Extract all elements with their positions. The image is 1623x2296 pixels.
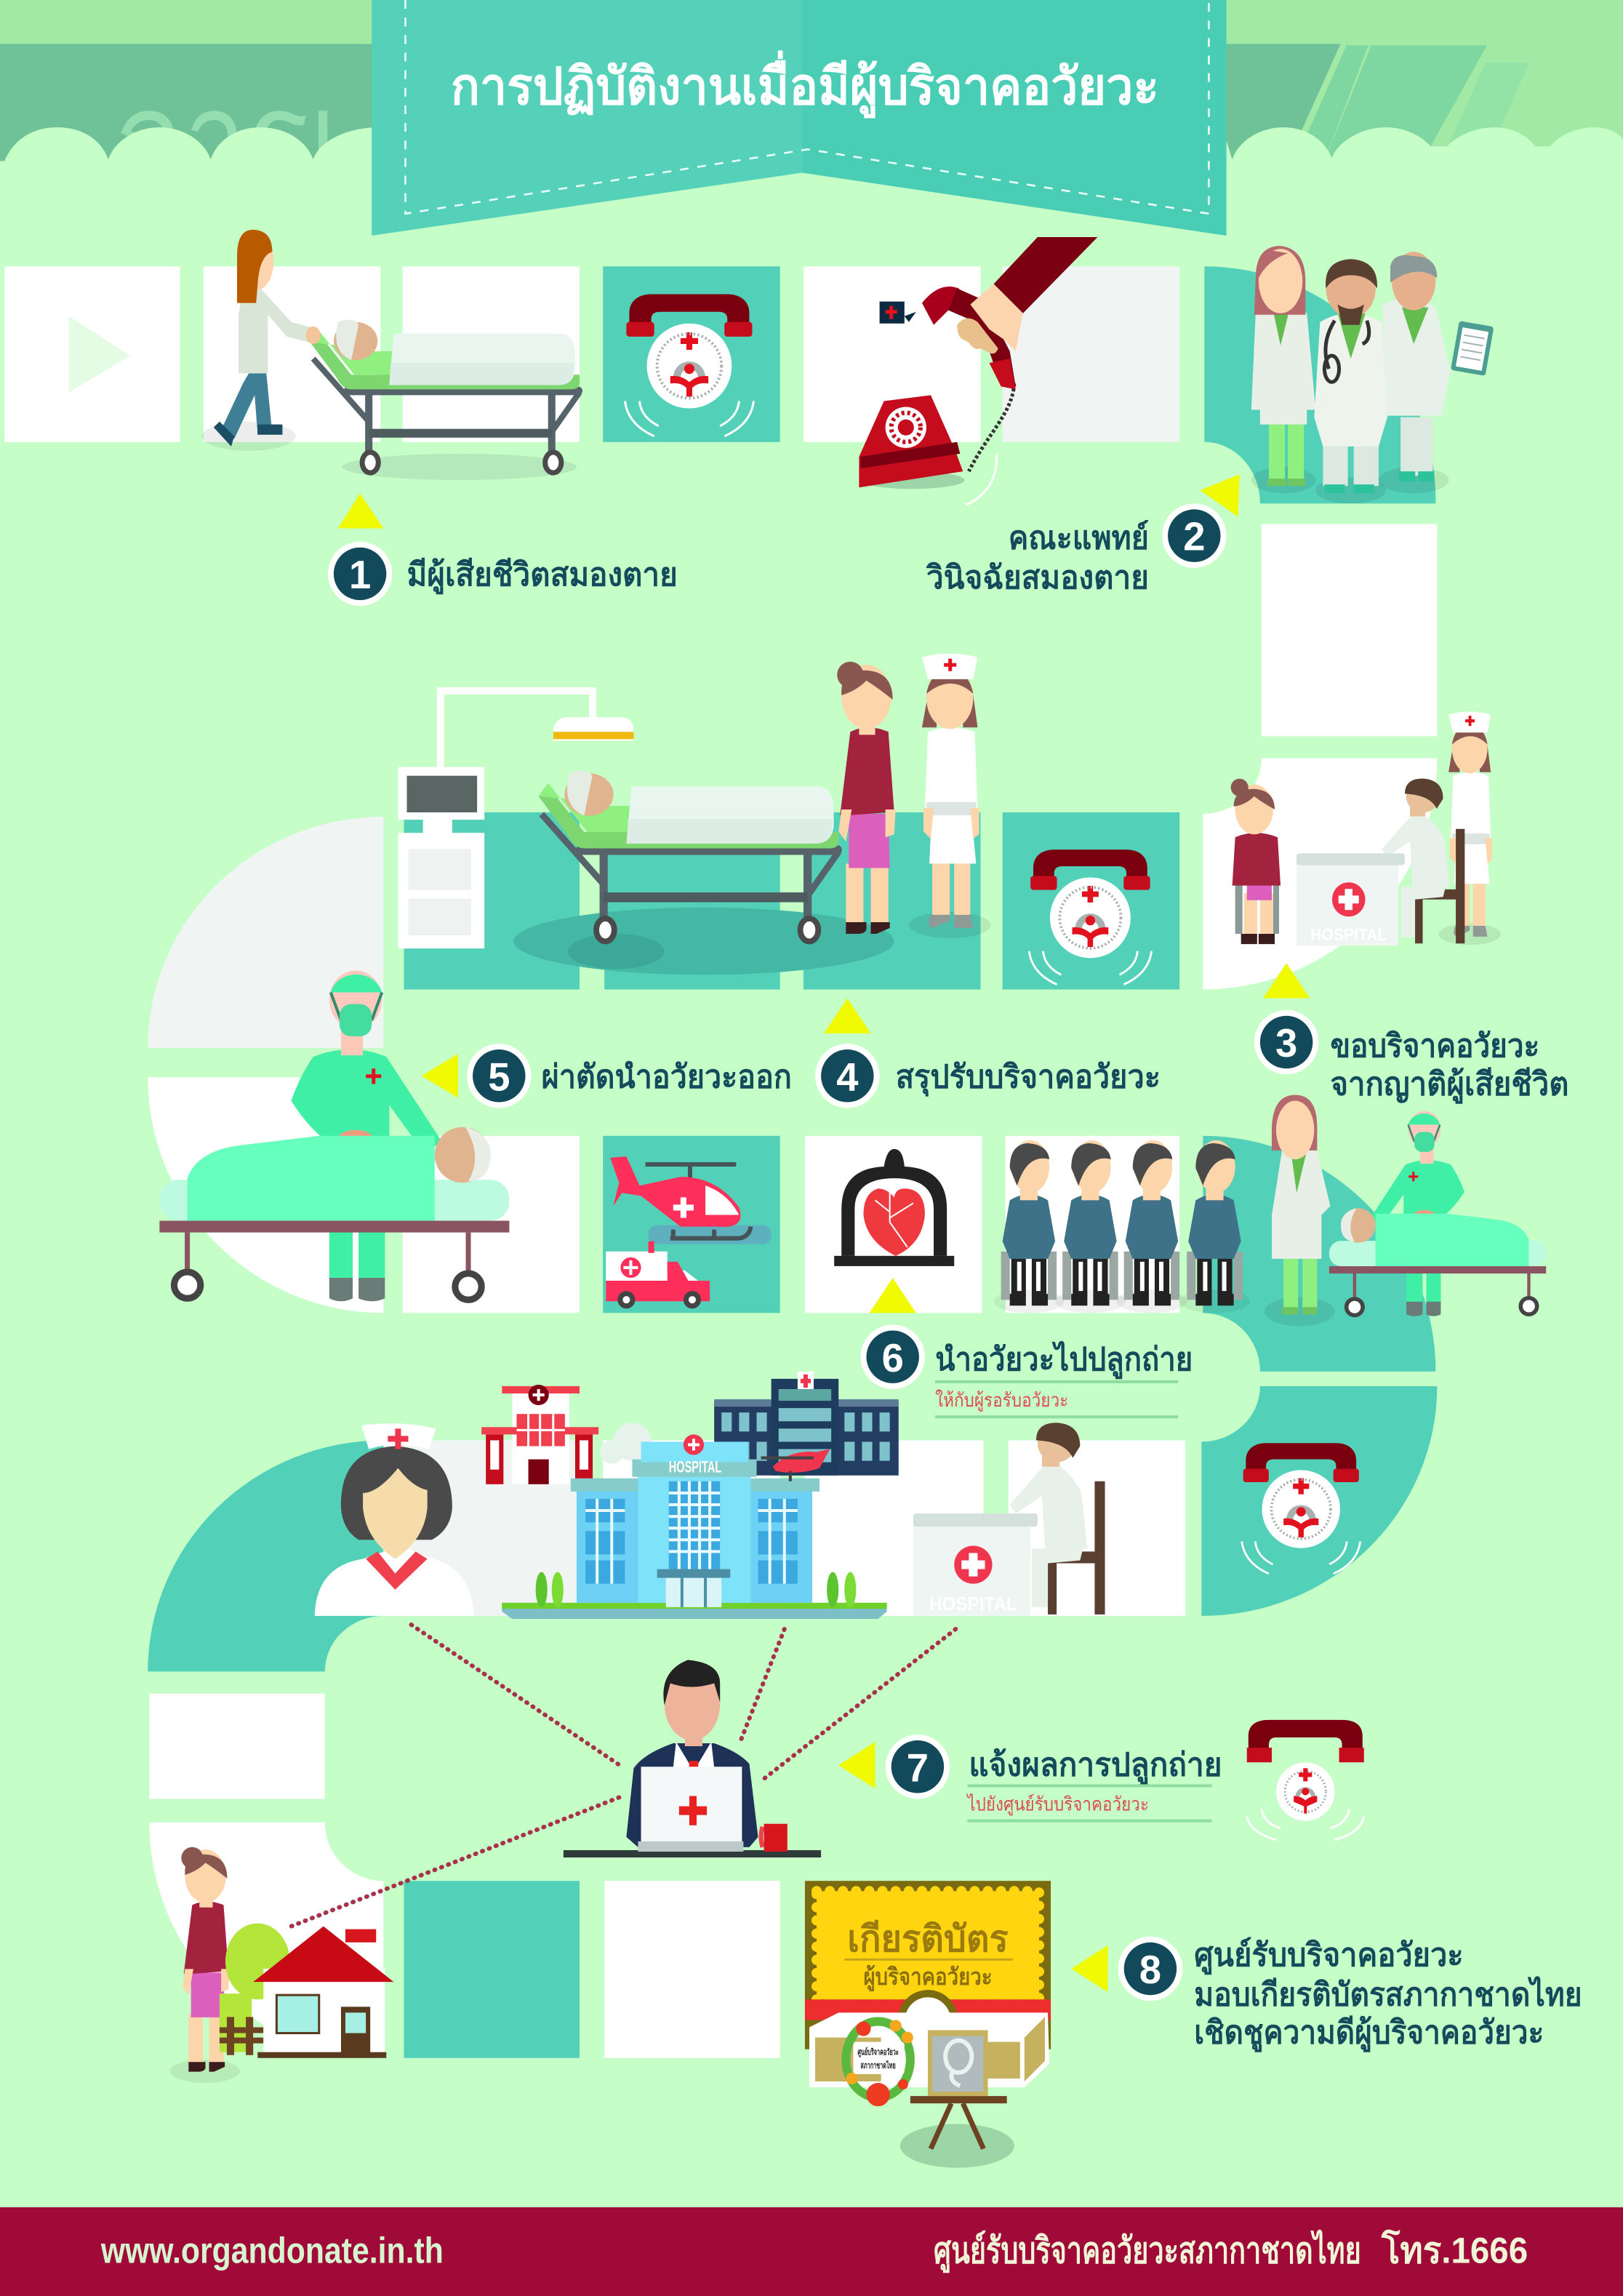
road row 5 tiles <box>149 1694 780 2058</box>
step 8 marker and label <box>1071 1937 1582 2052</box>
illustration: family meeting at hospital desk <box>1231 711 1501 945</box>
title ribbon <box>372 0 1227 236</box>
illustration: coordinator at laptop <box>564 1660 821 1857</box>
illustration: team of doctors <box>1251 246 1494 503</box>
certificate heading: เกียรติบัตร <box>847 1918 1009 1959</box>
illustration: nurse portrait <box>315 1423 474 1616</box>
organisation and phone: ศูนย์รับบริจาคอวัยวะสภากาชาดไทย <box>934 2229 1361 2273</box>
step 6 triangle <box>869 1278 916 1313</box>
step 1 marker and label: มีผู้เสียชีวิตสมองตาย <box>407 557 678 594</box>
illustration: certificate and memorial: สภากาชาดไทย <box>860 2060 896 2071</box>
illustration: four waiting patients <box>994 1140 1250 1313</box>
step 7 marker and label: แจ้งผลการปลูกถ่าย <box>969 1747 1222 1784</box>
step 4 marker and label: สรุปรับบริจาคอวัยวะ <box>896 1059 1161 1097</box>
dotted connection lines <box>292 1625 955 1927</box>
step 3 marker and label: 3 <box>1275 1021 1297 1065</box>
icon: phone logo 3 <box>1242 1443 1360 1574</box>
illustration: doctor standing <box>1265 1095 1335 1326</box>
header band with ghost text and stripes <box>0 0 1623 211</box>
icon: phone logo 4 <box>1247 1720 1364 1840</box>
road row 2 tiles <box>148 759 1437 1048</box>
certificate subtitle: ผู้บริจาคอวัยวะ <box>863 1964 993 1992</box>
illustration: hand and ringing telephone <box>847 237 1097 505</box>
step 6 marker and label <box>860 1324 1193 1418</box>
step 2 marker and label: คณะแพทย์ <box>1009 520 1149 556</box>
step 6 marker and label: 6 <box>882 1336 904 1380</box>
step 7 marker and label: ไปยังศูนย์รับบริจาคอวัยวะ <box>966 1793 1149 1816</box>
step 5 marker and label: 5 <box>488 1055 510 1099</box>
illustration: nurse <box>909 654 991 938</box>
footer bar: โทร.1666 <box>1381 2229 1528 2271</box>
step 8 marker and label: เชิดชูความดีผู้บริจาคอวัยวะ <box>1194 2015 1544 2052</box>
illustration: certificate and memorial: ศูนย์บริจาคอวัยวะ <box>857 2047 899 2058</box>
icon: phone logo 1 <box>625 295 754 436</box>
website: www.organdonate.in.th <box>100 2230 444 2271</box>
step 2 marker and label: 2 <box>1183 515 1205 559</box>
icon: helicopter and ambulance <box>606 1156 772 1308</box>
illustration: surgeon removing organ <box>159 970 509 1301</box>
illustration: patient on bed step 4 <box>513 771 894 975</box>
road row 3 tiles <box>148 1077 1435 1372</box>
step 3 marker and label: จากญาติผู้เสียชีวิต <box>1330 1066 1569 1103</box>
icon: phone logo 2 <box>1029 849 1152 985</box>
step 4 marker and label: 4 <box>836 1055 858 1099</box>
road row 4 tiles <box>148 1386 1437 1671</box>
illustration: navy hospital building <box>714 1372 899 1476</box>
step 4 marker and label <box>815 999 1161 1108</box>
step 6 marker and label: นำอวัยวะไปปลูกถ่าย <box>935 1340 1193 1379</box>
step 1 marker and label <box>328 493 678 606</box>
step 8 marker and label: 8 <box>1139 1948 1161 1992</box>
step 3 marker and label: ขอบริจาคอวัยวะ <box>1330 1028 1539 1064</box>
step 5 marker and label: ผ่าตัดนำอวัยวะออก <box>542 1059 792 1095</box>
illustration: donor family and house <box>169 1847 393 2083</box>
step 6 marker and label: ให้กับผู้รอรับอวัยวะ <box>935 1389 1068 1412</box>
illustration: ventilator monitor and lamp <box>398 691 633 948</box>
illustration: red hospital building <box>481 1385 598 1484</box>
step 1 marker and label: 1 <box>349 553 371 597</box>
step 3 marker and label <box>1254 963 1569 1103</box>
illustration: certificate and memorial <box>805 1881 1051 2168</box>
clouds <box>0 127 1623 198</box>
illustration: doctor writing at hospital desk <box>913 1423 1105 1616</box>
step 7 marker and label: 7 <box>907 1745 929 1790</box>
icon: heart in bell jar <box>834 1149 954 1266</box>
step 2 marker and label: วินิจฉัยสมองตาย <box>926 560 1149 596</box>
header band with ghost text and stripes: การเ <box>114 67 348 211</box>
step 8 marker and label: มอบเกียรติบัตรสภากาชาดไทย <box>1194 1975 1582 2012</box>
illustration: relative in red dress <box>837 662 896 934</box>
step 8 marker and label: ศูนย์รับบริจาคอวัยวะ <box>1194 1937 1464 1975</box>
step 5 marker and label <box>422 1044 792 1108</box>
illustration: main blue hospital: HOSPITAL <box>669 1458 721 1476</box>
illustration: main blue hospital <box>502 1423 887 1619</box>
title: การปฏิบัติงานเมื่อมีผู้บริจาคอวัยวะ <box>451 50 1159 119</box>
illustration: doctor pushing stretcher <box>202 230 582 480</box>
step 7 marker and label <box>838 1735 1222 1823</box>
illustration: surgeon team small <box>1329 1111 1546 1316</box>
road row 1 tiles <box>4 266 1437 736</box>
step 2 marker and label <box>926 474 1240 596</box>
footer bar <box>0 2207 1623 2296</box>
